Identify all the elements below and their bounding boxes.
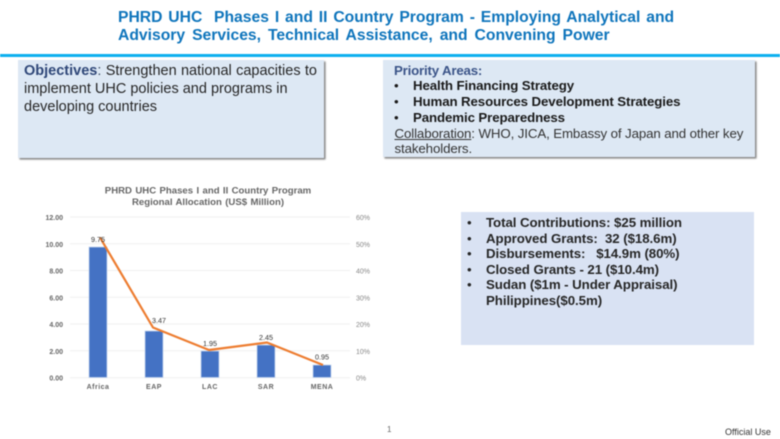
priority list — [394, 78, 681, 126]
panel: objectives: implement UHC policies and programs in — [24, 81, 288, 97]
panel: key figures: Approved Grants: 32 ($18.6m) — [486, 231, 677, 246]
bars — [89, 247, 331, 378]
left axis labels: 6.00 — [49, 295, 63, 302]
data labels — [91, 235, 329, 362]
chart title: PHRD UHC Phases I and II Country Program — [105, 186, 311, 196]
footer: official use: Official Use — [725, 427, 771, 437]
panel: key figures: Philippines($0.5m) — [486, 293, 602, 308]
title — [118, 9, 674, 44]
right axis labels: 0% — [356, 376, 366, 382]
category labels: Africa — [87, 384, 109, 391]
panel: key figures: Disbursements: $14.9m (80%) — [486, 246, 680, 261]
panel: key figures: Closed Grants - 21 ($10.4m) — [486, 262, 659, 277]
right axis labels: 10% — [356, 349, 370, 356]
panel: key figures: Total Contributions: $25 million — [486, 215, 682, 230]
category labels: MENA — [311, 384, 333, 391]
priority areas heading: Priority Areas: — [394, 62, 482, 78]
panel: key figures: Sudan ($1m - Under Appraisal) — [486, 277, 678, 292]
left axis labels — [45, 215, 63, 382]
collaboration text — [394, 126, 744, 156]
percentage line — [100, 238, 323, 365]
panel: key figures: • — [467, 262, 472, 277]
panel: key figures: • — [467, 246, 472, 261]
panel: objectives: developing countries — [24, 98, 157, 114]
collaboration text: Collaboration: WHO, JICA, Embassy of Japan and other key — [394, 126, 743, 140]
panel: objectives — [18, 60, 324, 158]
category labels: LAC — [202, 384, 218, 391]
data labels: 9.75 — [91, 235, 105, 244]
title: PHRD UHC Phases I and II Country Program - Employing Analytical and — [118, 9, 674, 26]
left axis labels: 2.00 — [49, 349, 63, 356]
page number: 1 — [387, 425, 391, 434]
priority list: • — [394, 94, 399, 109]
category labels: EAP — [146, 384, 162, 391]
data labels: 2.45 — [259, 333, 273, 342]
left axis labels: 8.00 — [49, 268, 63, 276]
right axis labels: 60% — [356, 215, 370, 222]
header rule — [0, 54, 780, 56]
left axis labels: 0.00 — [49, 376, 63, 382]
panel: objectives: Objectives: Strengthen national capacities to — [24, 63, 317, 79]
right axis labels: 50% — [356, 242, 370, 249]
panel: priority areas — [383, 60, 755, 157]
priority list: Pandemic Preparedness — [413, 110, 565, 125]
left axis labels: 12.00 — [45, 215, 63, 222]
priority list: • — [394, 110, 399, 125]
right axis labels: 20% — [356, 322, 370, 329]
right axis labels: 30% — [356, 295, 370, 302]
panel: key figures — [461, 212, 754, 345]
left axis labels: 10.00 — [45, 242, 63, 249]
left axis labels: 4.00 — [49, 322, 63, 329]
data labels: 3.47 — [152, 316, 166, 325]
data labels: 1.95 — [203, 339, 217, 348]
collaboration text: stakeholders. — [394, 141, 472, 156]
panel: key figures: • — [467, 215, 472, 230]
data labels: 0.95 — [315, 352, 329, 362]
priority list: Health Financing Strategy — [413, 78, 574, 93]
chart: regional allocation — [45, 186, 370, 391]
category labels — [87, 384, 333, 391]
chart title: Regional Allocation (US$ Million) — [132, 197, 284, 208]
right axis labels — [356, 215, 370, 382]
right axis labels: 40% — [356, 268, 370, 276]
title: Advisory Services, Technical Assistance, and Convening Power — [118, 27, 610, 44]
panel: key figures: • — [467, 277, 472, 292]
category labels: SAR — [258, 384, 274, 391]
priority list: • — [394, 78, 399, 93]
priority list: Human Resources Development Strategies — [413, 94, 680, 109]
chart title — [105, 186, 311, 208]
panel: key figures: • — [467, 231, 472, 246]
